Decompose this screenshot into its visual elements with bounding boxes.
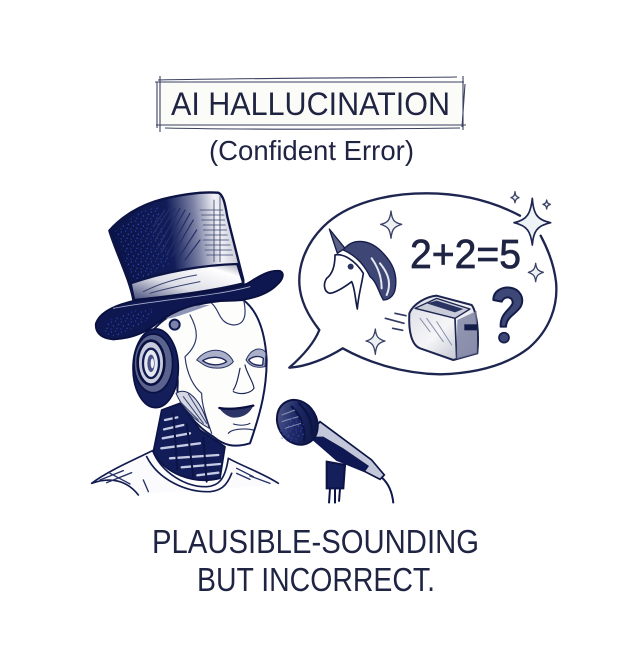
stand <box>327 462 345 503</box>
unicorn <box>324 229 396 309</box>
ear piece <box>133 329 178 408</box>
head panel lines <box>185 302 253 433</box>
equation: 2+2=5 <box>410 231 521 277</box>
bubble outline <box>289 193 556 374</box>
caption: BUT INCORRECT. <box>197 561 435 598</box>
neck <box>153 403 225 482</box>
toaster <box>409 296 478 360</box>
caption: PLAUSIBLE-SOUNDING <box>152 523 479 560</box>
small sparkles <box>366 192 550 354</box>
motion lines <box>385 313 406 330</box>
nose <box>233 365 254 394</box>
rivet <box>170 320 180 330</box>
speech bubble <box>289 192 556 374</box>
caption <box>152 523 479 598</box>
microphone <box>269 392 393 503</box>
robot with top hat <box>92 192 283 495</box>
big sparkle <box>514 198 551 245</box>
head <box>153 300 267 446</box>
cable <box>382 477 393 503</box>
question mark <box>493 287 522 343</box>
title box <box>155 76 466 132</box>
hat band <box>131 264 243 300</box>
mic head <box>269 392 326 452</box>
mouth <box>219 406 253 418</box>
hat brim <box>96 271 283 339</box>
shoulders <box>92 451 278 495</box>
handle <box>308 422 384 479</box>
title: AI HALLUCINATION <box>171 86 450 122</box>
subtitle: (Confident Error) <box>209 135 414 166</box>
hat crown <box>109 192 243 300</box>
eyes <box>197 350 233 368</box>
